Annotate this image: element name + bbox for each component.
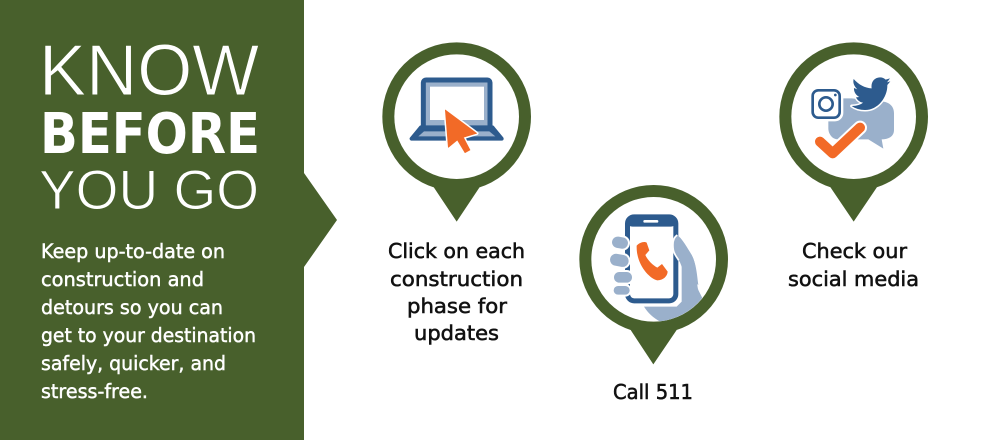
caption: click on each construction phase (388, 239, 525, 345)
intro paragraph: safely, quicker, and (41, 352, 226, 375)
intro paragraph: stress-free. (41, 380, 148, 403)
pin: call 511 (579, 185, 728, 364)
intro paragraph: construction and (41, 268, 204, 291)
caption: click on each construction phase: updates (414, 321, 499, 345)
handset (637, 242, 668, 280)
panel background with arrow (0, 0, 337, 440)
title line: KNOW: KNOW (39, 31, 259, 111)
pin inner circle (591, 197, 716, 322)
caption: check our social media (788, 239, 919, 291)
title line: BEFORE: BEFORE (40, 102, 260, 167)
icon: twitter bird (852, 77, 890, 110)
caption: click on each construction phase: Click on each (388, 239, 525, 263)
icon: social media (810, 77, 894, 153)
speech bubbles (828, 98, 894, 149)
intro paragraph: detours so you can (41, 296, 223, 319)
panel: green intro (0, 0, 337, 440)
phone (627, 217, 676, 301)
pin shape (579, 185, 728, 364)
icon: check mark (820, 128, 860, 153)
title line: YOU GO: YOU GO (39, 158, 259, 221)
pin: social media (779, 42, 928, 222)
caption: check our social media: social media (788, 267, 919, 291)
intro paragraph: Keep up-to-date on (41, 240, 225, 263)
pin shape (382, 42, 531, 222)
intro paragraph: get to your destination (41, 324, 256, 347)
icon: hand holding phone (608, 216, 703, 323)
intro paragraph (41, 240, 256, 403)
caption: click on each construction phase: phase for (407, 294, 508, 318)
title (39, 31, 260, 221)
caption: click on each construction phase: construction (390, 267, 523, 291)
caption: check our social media: Check our (802, 239, 908, 263)
hand body behind phone (644, 235, 703, 323)
pin inner circle (394, 54, 519, 179)
caption: call 511: Call 511 (613, 380, 693, 404)
icon: instagram (810, 88, 842, 120)
pin: click on construction phase (382, 42, 531, 222)
pin inner circle (791, 54, 916, 179)
fingers (608, 235, 633, 296)
pin shape (779, 42, 928, 222)
thumb (673, 235, 698, 285)
icon: laptop with cursor (412, 80, 502, 153)
